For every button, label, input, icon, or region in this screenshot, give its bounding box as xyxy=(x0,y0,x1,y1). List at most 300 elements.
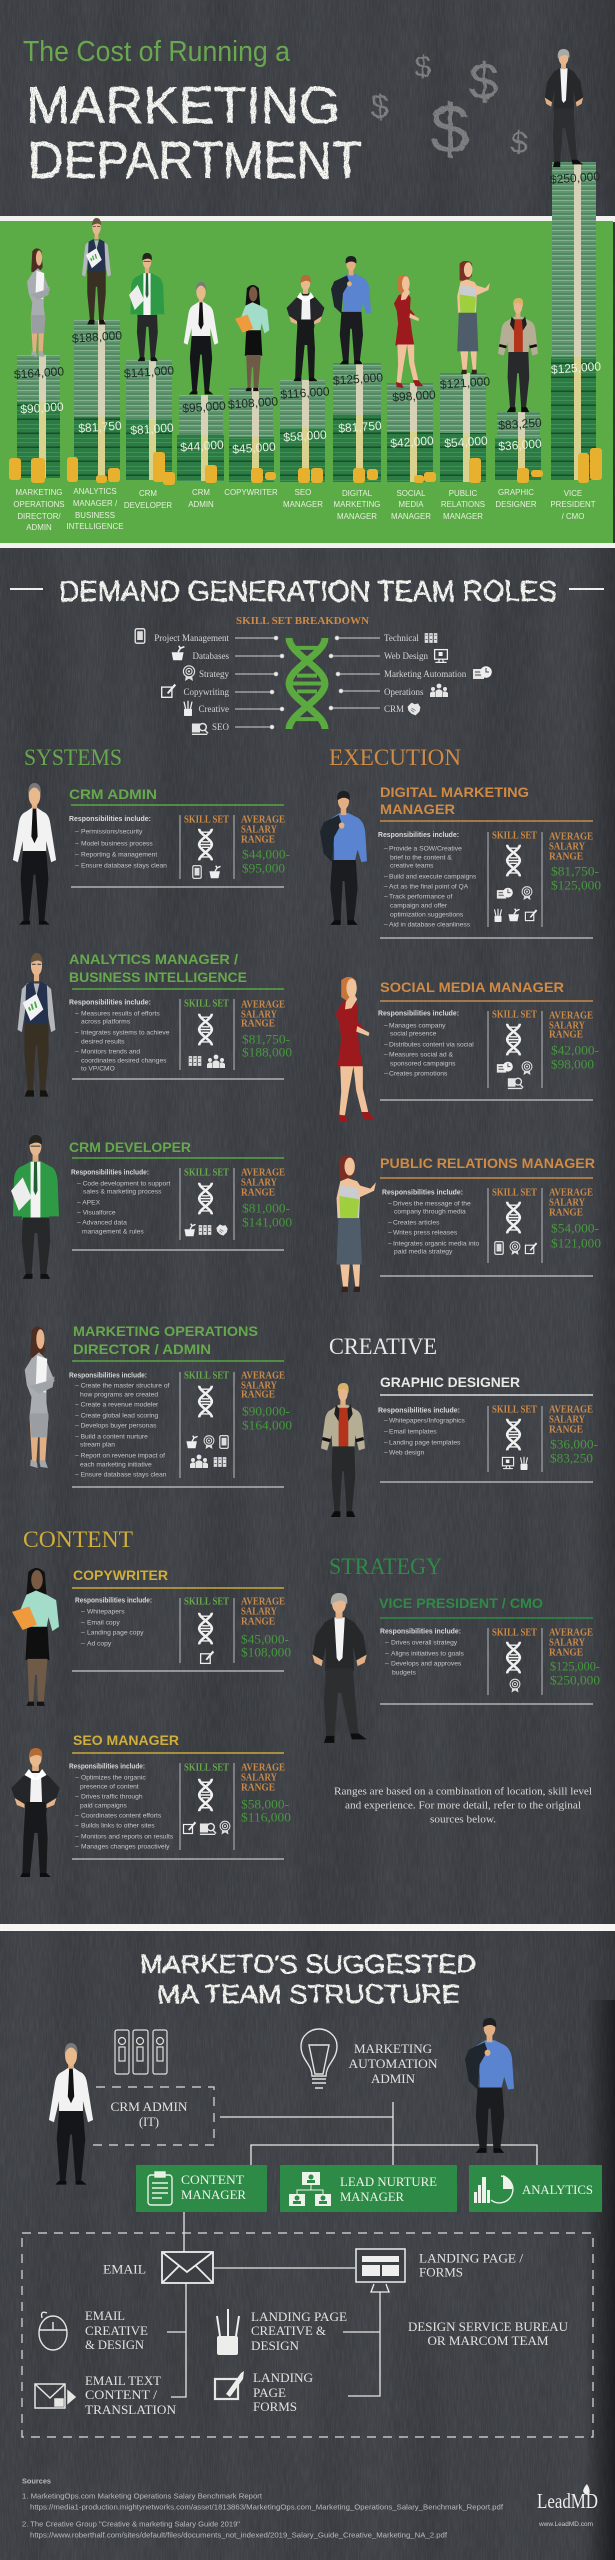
heading: marketo's suggested MA team structure: MARKETO'S SUGGESTED xyxy=(140,1949,476,1979)
responsibilities: – Create the master structure of xyxy=(75,1382,170,1390)
heading: GRAPHIC DESIGNER xyxy=(380,1374,520,1390)
salary figures on stacks: $42,000 xyxy=(390,433,434,450)
responsibilities: Coordinates content efforts xyxy=(81,1812,162,1820)
salary figures on stacks: $81,000 xyxy=(130,420,174,437)
figure: analytics manager xyxy=(18,953,55,1097)
salary range: $141,000 xyxy=(242,1214,292,1230)
responsibilities xyxy=(380,1626,465,1676)
role labels under stacks: MANAGER / xyxy=(73,499,118,508)
logo: LeadMD: www.LeadMD.com xyxy=(538,2522,593,2528)
label: design service bureau: DESIGN SERVICE BUREAU xyxy=(408,2319,569,2334)
responsibilities xyxy=(75,1596,152,1648)
salary range: $121,000 xyxy=(551,1236,601,1250)
chart: money stacks xyxy=(17,162,596,482)
skill set xyxy=(488,1628,542,1695)
figure: marketing operations director xyxy=(25,1327,55,1468)
salary range: RANGE xyxy=(241,1390,275,1400)
skill set xyxy=(180,1762,234,1850)
salary range: RANGE xyxy=(241,1018,275,1030)
responsibilities: Builds links to other sites xyxy=(81,1822,155,1830)
skill set: SKILL SET xyxy=(184,998,229,1010)
responsibilities: – xyxy=(81,1608,85,1616)
role labels under stacks: MARKETING xyxy=(334,500,380,509)
role labels under stacks: OPERATIONS xyxy=(13,500,65,509)
salary range: SALARY xyxy=(549,1638,585,1648)
salary range: $42,000- xyxy=(551,1042,599,1058)
salary range: AVERAGE xyxy=(241,1762,285,1774)
responsibilities: Model business process xyxy=(81,840,153,848)
panel: vice president card xyxy=(312,1593,600,1743)
salary range: SALARY xyxy=(241,1178,277,1188)
heading: MANAGER xyxy=(380,801,455,817)
icon: chalk dollar signs: $ xyxy=(470,53,499,111)
salary figures on stacks: $116,000 xyxy=(280,384,330,402)
text: marketing automation admin: MARKETING xyxy=(354,2041,432,2056)
text block: sources: Sources xyxy=(22,2476,51,2486)
salary range: RANGE xyxy=(241,1616,275,1628)
heading: systems: SYSTEMS xyxy=(24,745,122,770)
salary range xyxy=(241,1000,292,1060)
responsibilities: – xyxy=(75,1010,79,1018)
salary range: $45,000- xyxy=(241,1632,289,1646)
responsibilities: Landing page copy xyxy=(87,1630,144,1636)
title: the cost of running a: The Cost of Running a xyxy=(23,36,291,68)
salary figures on stacks: $81,750 xyxy=(338,418,382,435)
figure: digital marketing manager xyxy=(320,791,367,925)
salary figures on stacks: $125,000 xyxy=(551,359,602,377)
legend: left skills xyxy=(135,629,229,734)
skill set xyxy=(180,998,234,1070)
heading: demand generation team roles: DEMAND GENERATION TEAM ROLES xyxy=(59,576,557,608)
text block: ranges note xyxy=(334,1786,592,1826)
responsibilities: Responsibilities include: xyxy=(75,1596,152,1604)
heading: marketo's suggested MA team structure xyxy=(140,1949,476,2009)
label: landing page / forms: FORMS xyxy=(419,2264,463,2280)
responsibilities: Whitepapers/Infographics xyxy=(389,1418,465,1424)
salary range: SALARY xyxy=(241,1010,277,1020)
responsibilities: Provide a SOW/Creative xyxy=(389,846,462,852)
salary range: $116,000 xyxy=(241,1810,291,1824)
responsibilities: Drives the message of the xyxy=(393,1200,471,1208)
label: email text content / translation: CONTENT / xyxy=(85,2387,157,2402)
responsibilities: – xyxy=(75,1048,79,1056)
salary range: AVERAGE xyxy=(549,832,593,842)
title: marketing: MARKETING xyxy=(26,77,340,135)
responsibilities: Responsibilities include: xyxy=(380,1626,461,1636)
skill set xyxy=(180,1596,234,1663)
responsibilities: – xyxy=(75,1834,79,1840)
responsibilities: Ad copy xyxy=(87,1640,112,1648)
responsibilities: – Build a content nurture xyxy=(75,1434,148,1440)
label: email text content / translation: EMAIL TEXT xyxy=(85,2373,161,2388)
responsibilities: – xyxy=(384,1440,388,1446)
label: email text content / translation xyxy=(85,2373,177,2417)
label: design service bureau xyxy=(408,2319,569,2348)
text block: ranges note: Ranges are based on a combination of location, skill level xyxy=(334,1786,592,1798)
responsibilities: – xyxy=(385,1650,389,1658)
salary range: AVERAGE xyxy=(241,1000,285,1010)
responsibilities: Monitors and reports on results xyxy=(81,1834,174,1840)
legend: left skills: Creative xyxy=(198,704,229,714)
salary figures on stacks: $95,000 xyxy=(182,398,226,415)
label: landing page creative & design: LANDING PAGE xyxy=(251,2309,347,2324)
icon: large dna helix xyxy=(289,638,325,729)
salary range: $125,000- xyxy=(550,1658,600,1674)
hero header xyxy=(23,36,528,190)
responsibilities xyxy=(378,830,477,928)
legend: right skills xyxy=(384,633,492,715)
skill set xyxy=(488,1404,542,1472)
skill set: SKILL SET xyxy=(492,1010,537,1020)
responsibilities: – xyxy=(388,1240,392,1248)
responsibilities: – xyxy=(384,1042,388,1048)
role labels under stacks: DIGITAL xyxy=(342,489,373,498)
heading: execution: EXECUTION xyxy=(329,745,461,770)
responsibilities: sponsored campaigns xyxy=(390,1060,456,1068)
responsibilities: Develops and approves xyxy=(391,1660,462,1668)
responsibilities xyxy=(382,1188,480,1256)
panel: marketing operations card xyxy=(25,1323,292,1487)
heading xyxy=(69,951,247,985)
label: email creative & design: & DESIGN xyxy=(85,2337,145,2352)
salary figures on stacks: $36,000 xyxy=(498,436,542,453)
salary range xyxy=(549,1628,600,1688)
responsibilities: Act as the final point of QA xyxy=(389,884,469,890)
salary range: $164,000 xyxy=(242,1418,292,1432)
responsibilities: Optimizes the organic xyxy=(81,1774,146,1782)
label: landing page forms: FORMS xyxy=(253,2399,297,2414)
panel: copywriter card xyxy=(12,1567,291,1706)
responsibilities: – xyxy=(384,1052,388,1058)
responsibilities: Drives traffic through xyxy=(81,1794,143,1800)
salary figures on stacks: $90,000 xyxy=(20,399,64,416)
responsibilities: – Report on revenue impact of xyxy=(75,1452,165,1460)
responsibilities: – xyxy=(384,884,388,890)
responsibilities: – xyxy=(75,1030,79,1036)
responsibilities: Web design xyxy=(389,1450,424,1456)
box: lead nurture manager xyxy=(280,2165,457,2212)
skill set xyxy=(488,830,542,927)
CRM admin dashed box xyxy=(88,2087,214,2145)
responsibilities: Landing page templates xyxy=(389,1440,461,1446)
responsibilities: Creates promotions xyxy=(389,1070,448,1078)
salary figures on stacks: $98,000 xyxy=(392,387,436,404)
role labels under stacks: MEDIA xyxy=(398,500,424,509)
heading: MARKETING OPERATIONS xyxy=(73,1323,258,1339)
salary range: RANGE xyxy=(549,1030,583,1040)
salary range: RANGE xyxy=(241,1188,275,1198)
CRM admin dashed box: CRM ADMIN xyxy=(110,2099,188,2114)
heading: PUBLIC RELATIONS MANAGER xyxy=(380,1155,595,1171)
role labels under stacks: MANAGER xyxy=(443,512,483,521)
responsibilities: Integrates organic media into xyxy=(393,1240,480,1248)
responsibilities: paid media strategy xyxy=(394,1248,453,1256)
icon: mail send xyxy=(35,2384,75,2408)
salary range xyxy=(241,814,290,876)
responsibilities: Aid in database cleanliness xyxy=(389,922,471,928)
responsibilities: – xyxy=(75,852,79,858)
salary range: $36,000- xyxy=(550,1436,598,1452)
responsibilities: – xyxy=(81,1620,85,1626)
salary range xyxy=(241,1168,292,1230)
salary range: SALARY xyxy=(241,824,277,836)
responsibilities: – xyxy=(388,1220,392,1226)
icon: chalk dollar signs: $ xyxy=(510,125,528,160)
responsibilities: presence of content xyxy=(80,1784,139,1790)
legend: right skills: Marketing Automation xyxy=(384,669,467,679)
responsibilities: – Ensure database stays clean xyxy=(75,1472,167,1478)
responsibilities: Integrates systems to achieve xyxy=(81,1030,170,1036)
heading: CRM ADMIN xyxy=(69,786,157,802)
salary range: $125,000 xyxy=(551,878,601,892)
salary figures on stacks: $141,000 xyxy=(124,363,175,381)
responsibilities: across platforms xyxy=(81,1018,131,1026)
CRM admin dashed box: (IT) xyxy=(139,2114,159,2129)
legend: left skills: Project Management xyxy=(154,633,229,643)
text: marketing automation admin: AUTOMATION xyxy=(348,2056,438,2071)
heading: creative: CREATIVE xyxy=(329,1334,437,1359)
figure: social media manager xyxy=(336,977,375,1122)
salary figures on stacks: $108,000 xyxy=(228,394,279,412)
role labels under stacks: MANAGER xyxy=(391,512,431,521)
box: lead nurture manager: LEAD NURTURE xyxy=(340,2174,437,2189)
figure: CRM admin xyxy=(49,2043,93,2185)
responsibilities: paid campaigns xyxy=(80,1802,127,1810)
skill set: SKILL SET xyxy=(184,1168,229,1178)
responsibilities: Build and execute campaigns xyxy=(389,874,477,880)
responsibilities: Responsibilities include: xyxy=(71,1168,149,1176)
responsibilities: Ensure database stays clean xyxy=(81,862,167,870)
box: analytics: ANALYTICS xyxy=(522,2182,593,2197)
responsibilities: management & rules xyxy=(82,1228,144,1236)
salary figures on stacks: $164,000 xyxy=(14,364,65,382)
salary range: $188,000 xyxy=(242,1044,292,1060)
salary range: RANGE xyxy=(549,1208,583,1218)
panel: skill set breakdown legend xyxy=(135,616,492,734)
icon: chalk dollar signs: $ xyxy=(414,49,432,84)
responsibilities xyxy=(69,998,170,1072)
label: landing page forms: LANDING xyxy=(253,2370,313,2385)
heading: marketo's suggested MA team structure: MA TEAM STRUCTURE xyxy=(157,1979,460,2009)
legend connector lines xyxy=(235,636,380,729)
responsibilities: Aligns initiatives to goals xyxy=(391,1650,465,1658)
skill set: SKILL SET xyxy=(492,1188,537,1198)
responsibilities: social presence xyxy=(390,1030,437,1038)
label: landing page / forms xyxy=(419,2250,523,2280)
responsibilities: stream plan xyxy=(80,1442,115,1448)
salary figures on stacks: $58,000 xyxy=(283,427,327,444)
panel: digital marketing manager card xyxy=(320,784,601,938)
responsibilities xyxy=(69,1370,170,1478)
legend: right skills: Operations xyxy=(384,687,424,697)
panel: analytics manager card xyxy=(18,951,292,1097)
label: landing page creative & design: DESIGN xyxy=(251,2338,300,2353)
salary range: $95,000 xyxy=(242,860,285,876)
responsibilities: Manages changes proactively xyxy=(81,1844,170,1850)
legend: left skills: SEO xyxy=(212,722,229,732)
text block: sources: 2. The Creative Group "Creative & marketing Salary Guide 2019" xyxy=(22,2520,240,2528)
responsibilities: – xyxy=(388,1200,392,1208)
responsibilities: coordinates desired changes xyxy=(81,1058,167,1064)
panel: SEO manager card xyxy=(11,1732,291,1877)
salary range xyxy=(241,1370,292,1432)
responsibilities: Responsibilities include: xyxy=(69,814,151,823)
box: content manager xyxy=(136,2165,267,2212)
label: email creative & design: EMAIL xyxy=(85,2308,125,2323)
responsibilities: Email templates xyxy=(389,1428,437,1436)
responsibilities: Measures results of efforts xyxy=(81,1010,160,1018)
salary range: SALARY xyxy=(549,1414,585,1426)
salary figures on stacks: $83,250 xyxy=(498,415,542,432)
box: content manager: CONTENT xyxy=(181,2172,244,2187)
icon: mouse xyxy=(39,2312,67,2350)
salary figures on stacks: $250,000 xyxy=(550,169,601,187)
responsibilities: – xyxy=(384,1450,388,1456)
responsibilities: Reporting & management xyxy=(81,852,157,858)
responsibilities: Responsibilities include: xyxy=(378,1406,460,1414)
salary range: SALARY xyxy=(549,1020,585,1032)
responsibilities xyxy=(69,814,167,870)
salary range: SALARY xyxy=(549,842,585,852)
responsibilities: Creates articles xyxy=(393,1220,440,1226)
responsibilities: – xyxy=(384,894,388,900)
responsibilities: Drives overall strategy xyxy=(391,1640,458,1646)
responsibilities: – xyxy=(384,1070,388,1078)
skill set: SKILL SET xyxy=(492,830,537,842)
salary range: $83,250 xyxy=(550,1450,593,1466)
responsibilities: – xyxy=(75,1774,79,1782)
skill set xyxy=(180,1370,234,1478)
salary figures on stacks: $121,000 xyxy=(440,374,491,392)
text block: sources xyxy=(22,2476,504,2540)
salary range: SALARY xyxy=(549,1198,585,1208)
salary range: RANGE xyxy=(549,852,583,862)
design team dashed box xyxy=(22,2233,593,2437)
role labels under stacks: SOCIAL xyxy=(397,489,426,498)
text block: ranges note: and experience. For more detail, refer to the original xyxy=(345,1800,581,1812)
panel: team structure diagram xyxy=(22,2018,602,2437)
responsibilities: Responsibilities include: xyxy=(69,998,151,1006)
responsibilities: creative teams xyxy=(390,862,434,870)
responsibilities: company through media xyxy=(394,1208,466,1216)
legend: left skills: Copywriting xyxy=(183,687,229,697)
salary figures on stacks: $44,000 xyxy=(180,437,224,454)
role labels under stacks: MARKETING xyxy=(16,488,62,497)
salary range: $81,750- xyxy=(551,864,599,878)
responsibilities: – xyxy=(75,862,79,870)
skill set xyxy=(180,814,234,879)
label: email text content / translation: TRANSLATION xyxy=(85,2402,177,2417)
responsibilities: – xyxy=(384,1022,388,1030)
skill set: SKILL SET xyxy=(184,814,229,826)
heading: ANALYTICS MANAGER / xyxy=(69,951,238,967)
responsibilities: – xyxy=(75,840,79,848)
heading: SEO MANAGER xyxy=(73,1732,179,1748)
label: email creative & design xyxy=(85,2308,148,2352)
salary range xyxy=(549,1188,601,1250)
role labels under stacks: ANALYTICS xyxy=(73,487,117,496)
salary range: $81,000- xyxy=(242,1200,290,1216)
label: email creative & design: CREATIVE xyxy=(85,2323,148,2338)
figure: marketing automation admin xyxy=(465,2018,514,2153)
responsibilities: Permissions/security xyxy=(81,828,143,836)
responsibilities: Responsibilities include: xyxy=(69,1370,147,1380)
responsibilities: Manages company xyxy=(389,1022,446,1030)
salary figures on stacks: $125,000 xyxy=(333,370,384,388)
responsibilities: – xyxy=(384,922,388,928)
role labels under stacks: DEVELOPER xyxy=(124,501,172,510)
responsibilities: Monitors trends and xyxy=(81,1048,140,1056)
skill set xyxy=(488,1188,542,1263)
responsibilities: Responsibilities include: xyxy=(69,1762,145,1770)
icon: pencils in cup xyxy=(217,2309,239,2355)
icon: landing page monitor xyxy=(356,2249,405,2292)
responsibilities: – xyxy=(75,828,79,836)
responsibilities xyxy=(378,1406,465,1456)
icon: servers xyxy=(115,2030,167,2074)
salary range: SALARY xyxy=(241,1606,277,1618)
salary figures on stacks: $188,000 xyxy=(72,328,123,346)
salary range xyxy=(549,1010,599,1072)
box: lead nurture manager: MANAGER xyxy=(340,2189,404,2204)
label: landing page forms: PAGE xyxy=(253,2385,286,2400)
salary range: $54,000- xyxy=(551,1220,599,1236)
salary range: AVERAGE xyxy=(241,1596,285,1608)
skill set xyxy=(488,1010,542,1088)
org chart connectors xyxy=(167,2102,537,2397)
people on stacks xyxy=(27,49,583,412)
salary range: AVERAGE xyxy=(241,814,285,826)
responsibilities: optimization suggestions xyxy=(390,912,464,918)
salary range: RANGE xyxy=(241,1782,275,1794)
legend: right skills: CRM xyxy=(384,704,404,714)
responsibilities: – Develops buyer personas xyxy=(75,1422,157,1430)
salary figures on stacks: $45,000 xyxy=(232,439,276,456)
text block: sources: 1. MarketingOps.com Marketing Operations Salary Benchmark Report xyxy=(22,2492,262,2500)
responsibilities: – Code development to support xyxy=(77,1180,170,1188)
responsibilities: Distributes content via social xyxy=(389,1042,474,1048)
responsibilities: budgets xyxy=(392,1670,416,1676)
responsibilities: Responsibilities include: xyxy=(378,1008,459,1018)
salary range: $44,000- xyxy=(242,846,290,862)
responsibilities: – xyxy=(385,1660,389,1668)
responsibilities: desired results xyxy=(81,1038,125,1046)
responsibilities: – Advanced data xyxy=(77,1220,127,1226)
responsibilities: – xyxy=(388,1230,392,1236)
role labels under stacks: DESIGNER xyxy=(495,500,537,509)
label: design service bureau: OR MARCOM TEAM xyxy=(428,2333,549,2348)
responsibilities: Measures social ad & xyxy=(389,1052,453,1058)
text: marketing automation admin xyxy=(348,2041,438,2086)
responsibilities: – xyxy=(385,1640,389,1646)
role labels under stacks: INTELLIGENCE xyxy=(66,522,124,531)
panel: CRM developer card xyxy=(11,1135,292,1279)
responsibilities: – xyxy=(75,1812,79,1820)
salary range: SALARY xyxy=(241,1380,277,1392)
responsibilities: Writes press releases xyxy=(393,1230,458,1236)
salary range: RANGE xyxy=(241,834,275,846)
role labels under stacks: COPYWRITER xyxy=(224,488,278,497)
role labels under stacks: SEO xyxy=(295,488,311,497)
salary figures on stacks xyxy=(14,169,602,456)
heading: VICE PRESIDENT / CMO xyxy=(379,1595,543,1611)
figure: SEO manager xyxy=(11,1748,60,1877)
box: content manager: MANAGER xyxy=(181,2187,246,2202)
role labels under stacks xyxy=(13,487,596,532)
responsibilities: – Visualforce xyxy=(77,1210,116,1216)
title: department: DEPARTMENT xyxy=(28,132,362,190)
legend: left skills: Databases xyxy=(193,651,229,661)
